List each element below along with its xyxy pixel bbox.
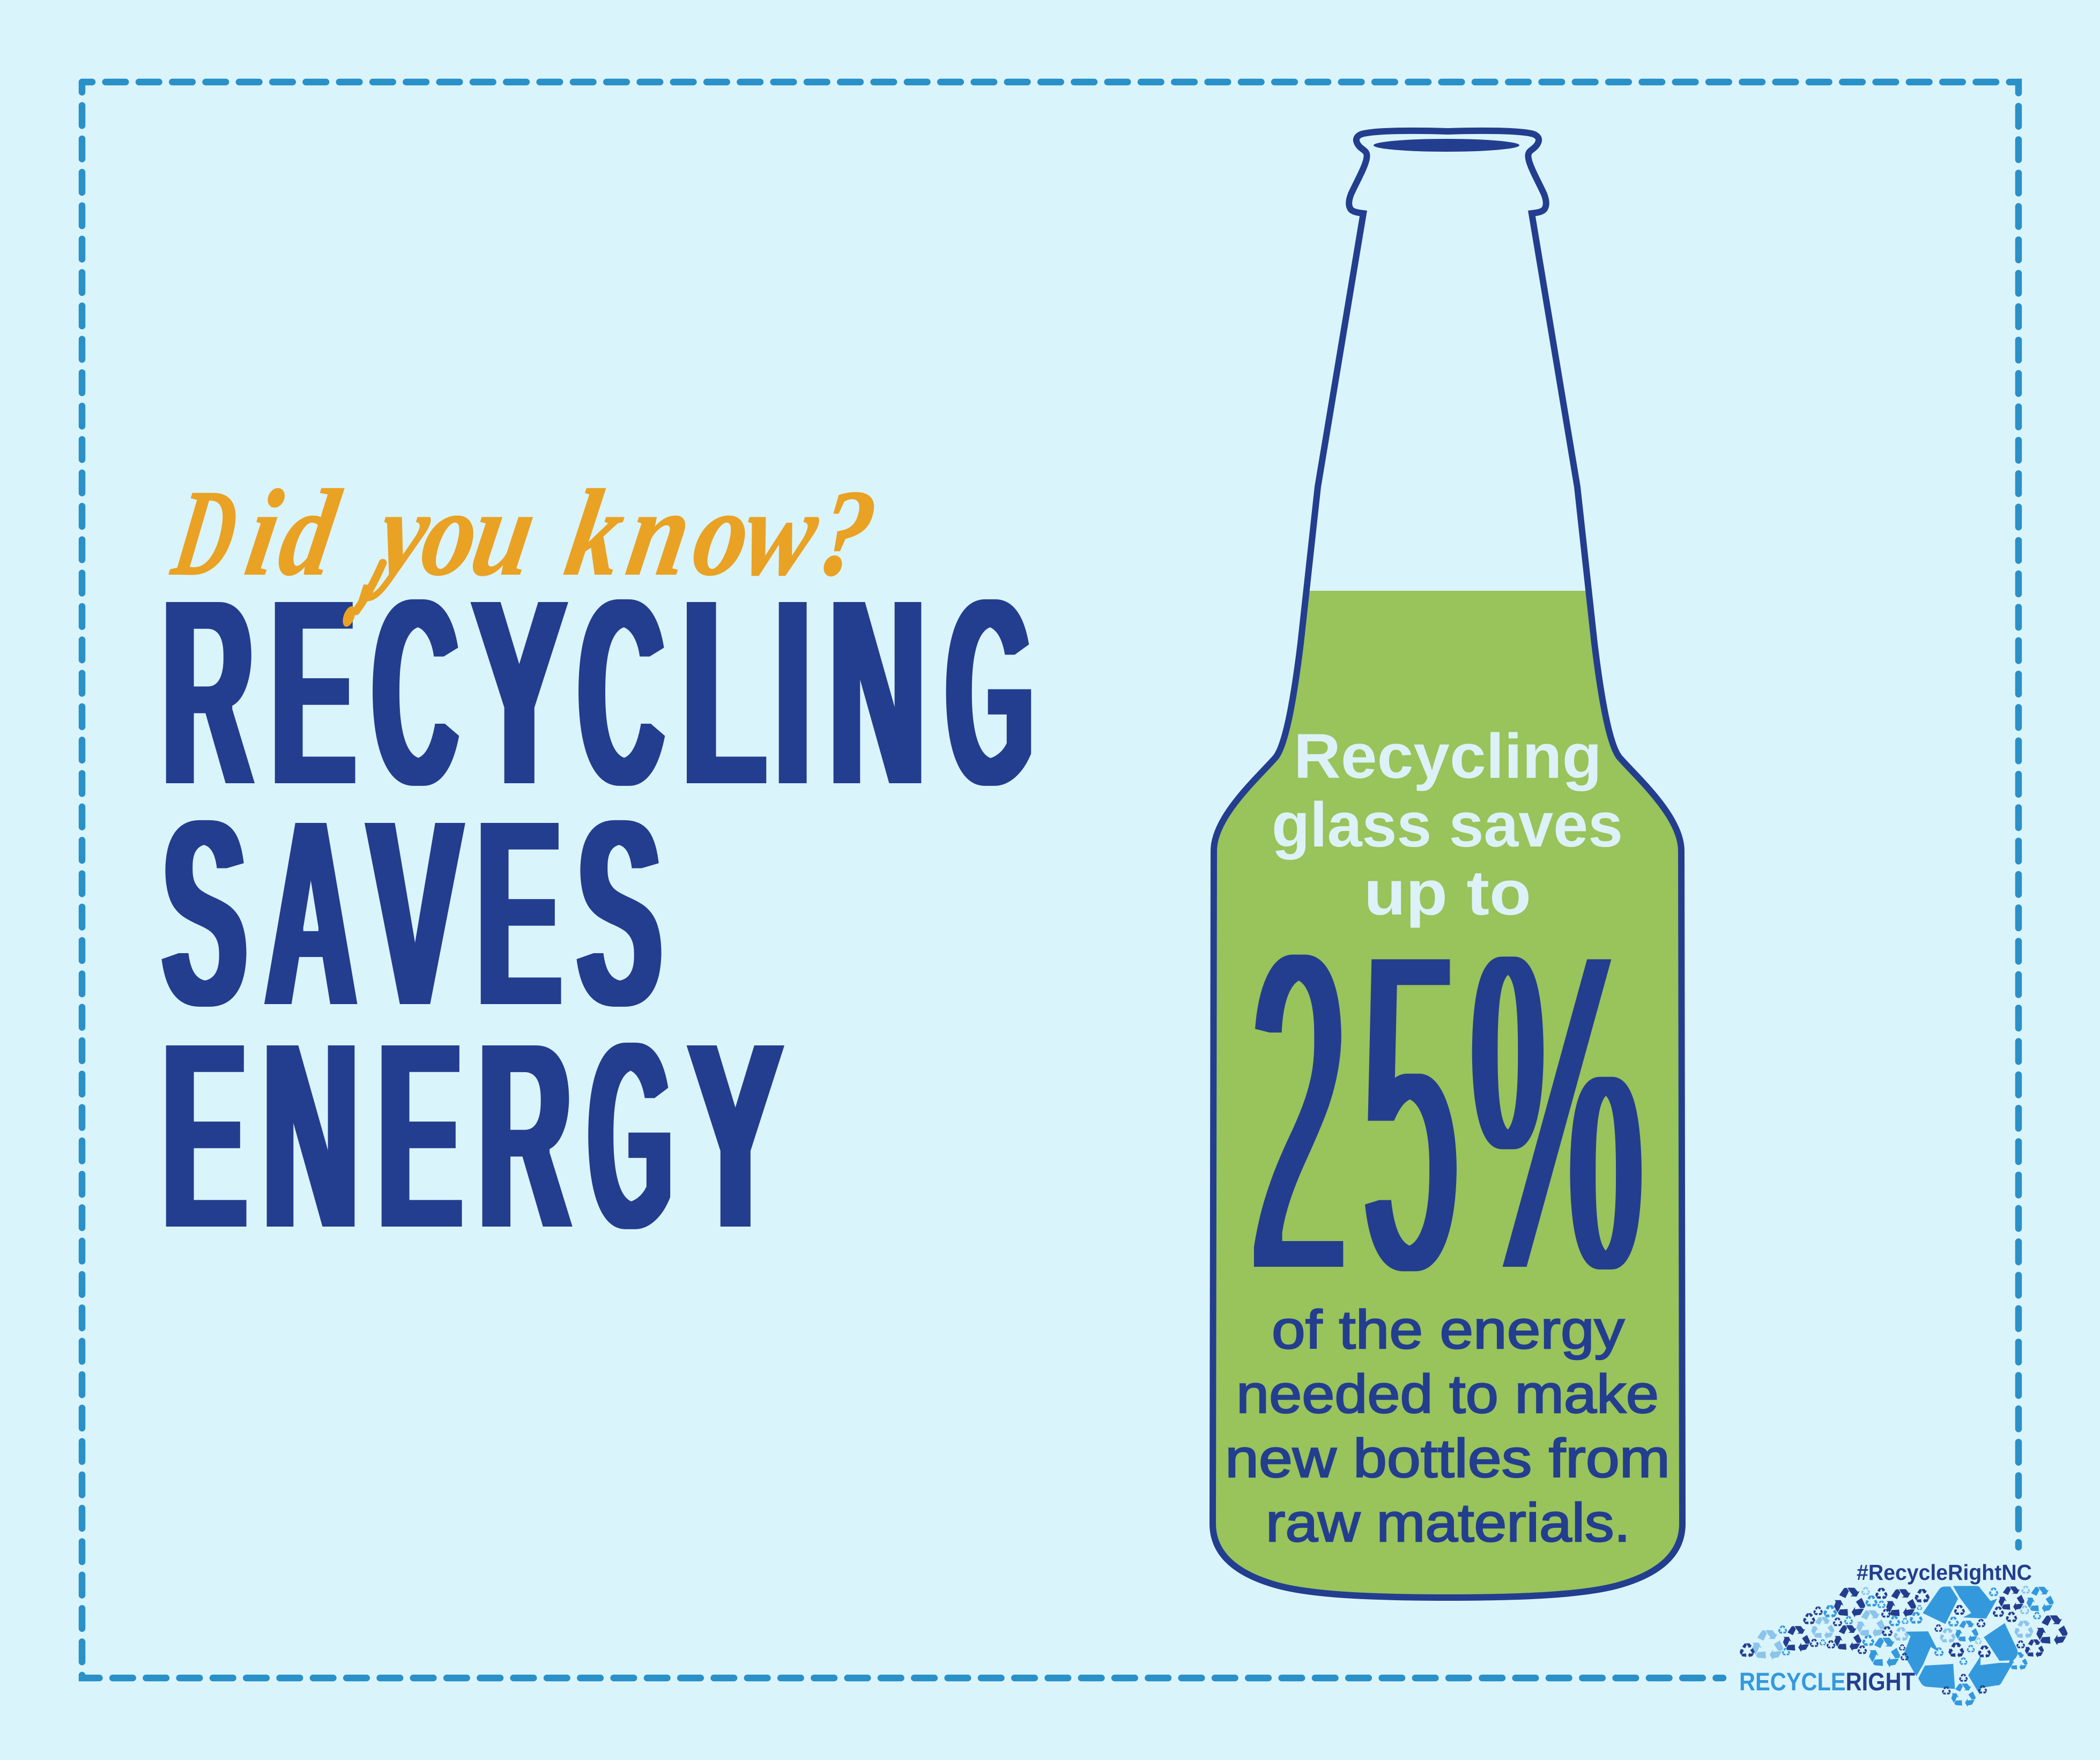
script heading: did you know: u <box>463 464 545 601</box>
heading: recycling saves energy: V <box>368 763 463 1063</box>
heading: recycling saves energy: I <box>775 542 810 842</box>
glass bottle with green liquid <box>1213 131 1682 1598</box>
heading: recycling saves energy: N <box>263 985 359 1285</box>
heading: recycling saves energy: C <box>578 542 664 842</box>
heading: recycling saves energy: R <box>162 542 254 842</box>
logo: recycle right NC <box>1739 1560 2071 1709</box>
bottle text: recycling glass saves up to: Recycling <box>1294 721 1602 792</box>
bottle text: of the energy: needed to make <box>1236 1364 1659 1424</box>
script heading: did you know: w <box>734 464 829 601</box>
heading: recycling saves energy <box>162 542 1033 1285</box>
heading: recycling saves energy: S <box>162 763 247 1063</box>
heading: recycling saves energy: G <box>946 542 1033 842</box>
script heading: did you know: o <box>684 464 761 601</box>
green liquid fill <box>1216 591 1679 1594</box>
heading: recycling saves energy: Y <box>472 542 567 842</box>
heading: recycling saves energy: R <box>479 985 571 1285</box>
bottle text: of the energy: new bottles from <box>1225 1429 1670 1489</box>
heading: recycling saves energy: N <box>829 542 925 842</box>
heading: recycling saves energy: G <box>589 985 672 1285</box>
bottle outline <box>1213 131 1682 1598</box>
script heading: did you know: o <box>413 464 489 601</box>
heading: recycling saves energy: E <box>271 542 355 842</box>
bottle text: recycling glass saves up to: up to <box>1364 858 1531 929</box>
script heading: did you know <box>164 464 885 628</box>
bottle text: recycling glass saves up to <box>1272 721 1623 929</box>
bottle text: of the energy: of the energy <box>1272 1300 1625 1360</box>
script heading: did you know: d <box>271 464 348 601</box>
bottle text: of the energy <box>1225 1300 1670 1553</box>
script heading: did you know: ? <box>808 464 885 601</box>
logo hashtag: #RecycleRightNC <box>1857 1560 2032 1585</box>
script heading: did you know: i <box>237 464 291 601</box>
heading: recycling saves energy: L <box>682 542 766 842</box>
script heading: did you know: y <box>359 464 441 601</box>
heading: recycling saves energy: E <box>378 985 462 1285</box>
bottle mouth <box>1374 139 1519 152</box>
statistic: 25 percent: 25 <box>1251 855 1458 1369</box>
bottle text: recycling glass saves up to: glass saves <box>1272 790 1623 860</box>
script heading: did you know: D <box>164 464 247 601</box>
logo wordmark: RECYCLERIGHT <box>1739 1667 1915 1696</box>
statistic: 25 percent <box>1251 855 1643 1369</box>
bottle text: of the energy: raw materials. <box>1266 1493 1630 1553</box>
script heading: did you know: n <box>619 464 701 601</box>
heading: recycling saves energy: S <box>577 763 662 1063</box>
heading: recycling saves energy: A <box>265 763 357 1063</box>
heading: recycling saves energy: E <box>477 763 561 1063</box>
statistic: 25 percent: % <box>1471 856 1643 1369</box>
heading: recycling saves energy: Y <box>688 985 783 1285</box>
heading: recycling saves energy: C <box>373 542 458 842</box>
icon: state map of recycling symbols <box>1739 1586 2071 1709</box>
heading: recycling saves energy: E <box>162 985 247 1285</box>
script heading: did you know: k <box>558 464 634 601</box>
